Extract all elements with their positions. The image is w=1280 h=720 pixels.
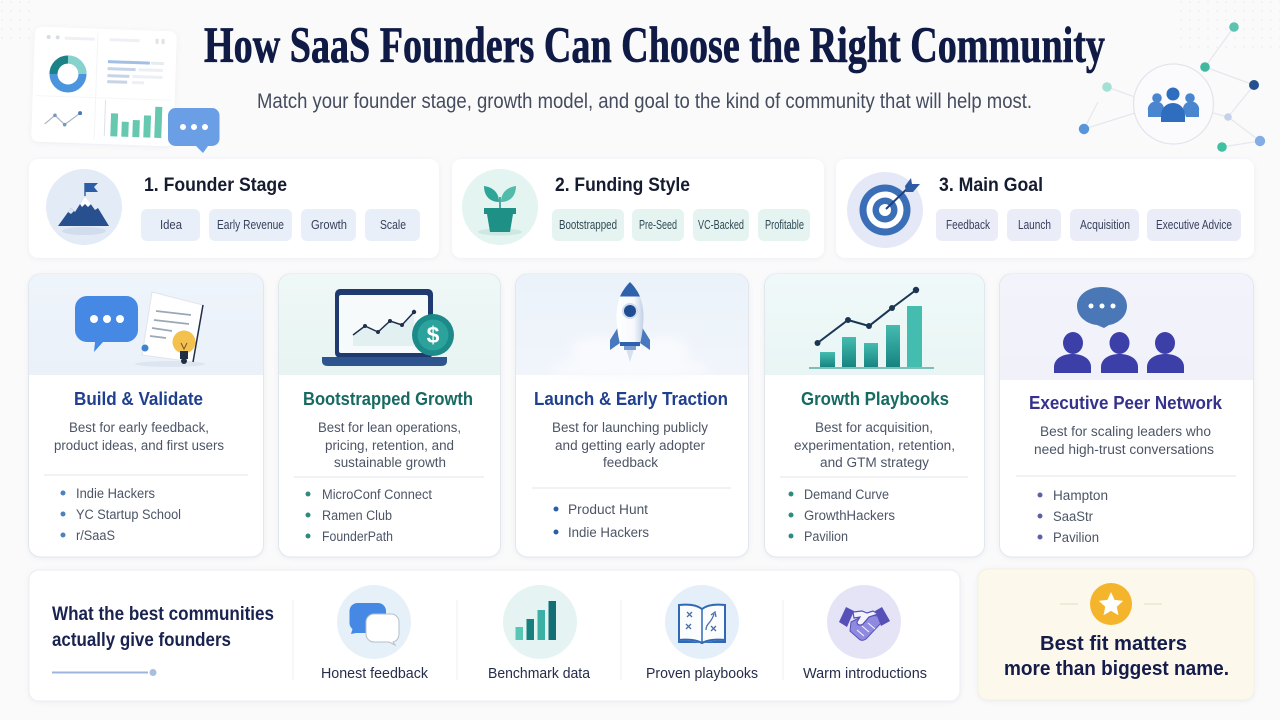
community list: SaaStr bbox=[1053, 509, 1093, 524]
pills: main goals: Executive Advice bbox=[1156, 218, 1232, 232]
icon: three peers with chat bubble bbox=[1054, 287, 1184, 373]
community list: GrowthHackers bbox=[804, 508, 895, 523]
pills: main goals: Acquisition bbox=[1080, 218, 1130, 232]
pills: founder stages: Scale bbox=[380, 218, 406, 232]
community list bbox=[60, 486, 181, 543]
pills: founder stages bbox=[141, 209, 420, 241]
community list: Indie Hackers bbox=[76, 486, 155, 501]
panel: executive peer network bbox=[1000, 274, 1254, 557]
heading: What the best communities bbox=[52, 604, 274, 625]
description bbox=[794, 420, 955, 470]
heading: Build & Validate bbox=[74, 389, 203, 409]
icon: potted plant bbox=[462, 169, 538, 245]
heading: actually give founders bbox=[52, 630, 231, 651]
heading: Launch & Early Traction bbox=[534, 389, 728, 409]
benefit: warm introductions bbox=[803, 585, 927, 682]
callout text bbox=[1004, 633, 1229, 680]
panel: bootstrapped growth bbox=[278, 274, 500, 557]
description bbox=[1034, 424, 1214, 457]
heading: Executive Peer Network bbox=[1029, 393, 1223, 413]
description: pricing, retention, and bbox=[325, 438, 454, 453]
icon: mountain with flag bbox=[46, 169, 122, 245]
heading: 2. Funding Style bbox=[555, 175, 690, 196]
description bbox=[54, 420, 224, 453]
callout: best fit bbox=[978, 569, 1254, 700]
description: feedback bbox=[603, 455, 658, 470]
community list: FounderPath bbox=[322, 529, 393, 544]
pills: founder stages: Idea bbox=[160, 218, 182, 232]
icon: laptop with chart and dollar coin: $ bbox=[427, 322, 440, 348]
icon: gold star bbox=[1060, 583, 1162, 625]
panel: what communities give founders bbox=[29, 570, 960, 701]
icon: target with arrow bbox=[847, 172, 923, 248]
pills: founder stages: Early Revenue bbox=[217, 218, 284, 232]
benefit: proven playbooks bbox=[646, 585, 758, 682]
community list: Product Hunt bbox=[568, 502, 648, 517]
community list: YC Startup School bbox=[76, 507, 181, 522]
panel: funding style bbox=[452, 159, 824, 258]
pills: funding styles: VC-Backed bbox=[698, 218, 744, 232]
description bbox=[552, 420, 708, 470]
icon: rising bar and line chart bbox=[809, 287, 934, 369]
community list: Hampton bbox=[1053, 488, 1108, 503]
description: Best for early feedback, bbox=[69, 420, 209, 435]
benefit: honest feedback bbox=[321, 585, 428, 682]
callout text: more than biggest name. bbox=[1004, 658, 1229, 680]
heading: Bootstrapped Growth bbox=[303, 389, 473, 409]
pills: funding styles bbox=[552, 209, 810, 241]
heading: Growth Playbooks bbox=[801, 389, 949, 409]
community list bbox=[1038, 488, 1108, 545]
community list: Ramen Club bbox=[322, 508, 392, 523]
description: Best for launching publicly bbox=[552, 420, 708, 435]
subtitle: Match your founder stage, growth model, and goal to the kind of community that will help most. bbox=[257, 90, 1032, 113]
panel: growth playbooks bbox=[764, 274, 984, 557]
benefit: benchmark data bbox=[488, 585, 591, 682]
panel: build and validate bbox=[28, 274, 264, 557]
icon: dashboard illustration bbox=[31, 27, 219, 153]
icon: community network bbox=[1079, 22, 1265, 152]
callout text: Best fit matters bbox=[1040, 633, 1187, 655]
panel: launch and early traction bbox=[516, 274, 748, 557]
community list: r/SaaS bbox=[76, 528, 115, 543]
community list bbox=[788, 487, 895, 544]
heading bbox=[52, 604, 274, 676]
pills: funding styles: Pre-Seed bbox=[639, 218, 677, 232]
description bbox=[318, 420, 461, 470]
pills: founder stages: Growth bbox=[311, 218, 347, 232]
description: and GTM strategy bbox=[820, 455, 929, 470]
pills: main goals: Launch bbox=[1018, 218, 1051, 232]
community list bbox=[554, 502, 649, 540]
panel: founder stage bbox=[29, 159, 439, 258]
heading: 3. Main Goal bbox=[939, 175, 1043, 196]
pills: funding styles: Profitable bbox=[765, 218, 804, 232]
heading: 1. Founder Stage bbox=[144, 175, 287, 196]
description: product ideas, and first users bbox=[54, 438, 224, 453]
description: Best for acquisition, bbox=[815, 420, 933, 435]
panel: main goal bbox=[836, 159, 1254, 258]
benefit: warm introductions: Warm introductions bbox=[803, 665, 927, 682]
description: Best for lean operations, bbox=[318, 420, 461, 435]
community list: Pavilion bbox=[1053, 530, 1099, 545]
benefit: honest feedback: Honest feedback bbox=[321, 665, 428, 682]
description: and getting early adopter bbox=[555, 438, 706, 453]
community list: Indie Hackers bbox=[568, 525, 649, 540]
community list: Pavilion bbox=[804, 529, 848, 544]
community list bbox=[306, 487, 432, 544]
description: sustainable growth bbox=[334, 455, 446, 470]
benefit: benchmark data: Benchmark data bbox=[488, 665, 591, 682]
pills: funding styles: Bootstrapped bbox=[559, 218, 617, 232]
pills: main goals bbox=[936, 209, 1241, 241]
community list: MicroConf Connect bbox=[322, 487, 432, 502]
description: experimentation, retention, bbox=[794, 438, 955, 453]
description: need high-trust conversations bbox=[1034, 442, 1214, 457]
pills: main goals: Feedback bbox=[946, 218, 991, 232]
benefit: proven playbooks: Proven playbooks bbox=[646, 665, 758, 682]
icon: chat, document and light bulb bbox=[75, 292, 205, 367]
icon: laptop with chart and dollar coin bbox=[322, 289, 454, 366]
community list: Demand Curve bbox=[804, 487, 889, 502]
icon: rocket and clouds bbox=[550, 282, 710, 378]
description: Best for scaling leaders who bbox=[1040, 424, 1211, 439]
